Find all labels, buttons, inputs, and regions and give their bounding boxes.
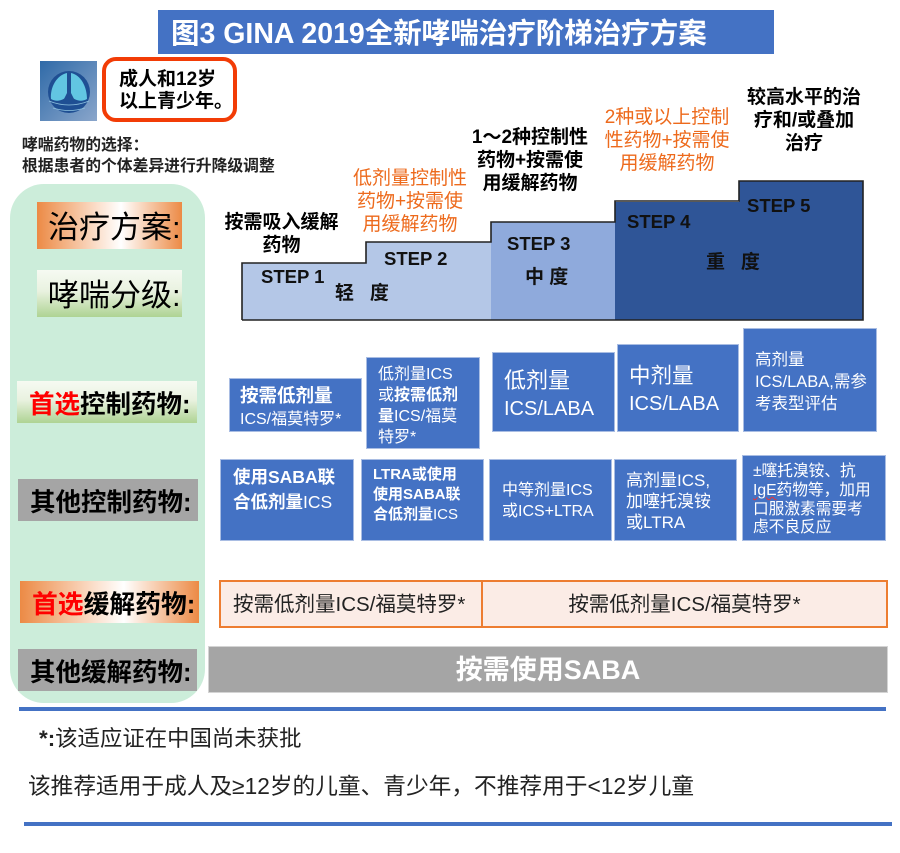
controller box: step 4 preferred: ICS/LABA [629, 393, 719, 415]
label: other reliever: 其他缓解药物: [30, 658, 192, 686]
step 1 heading: 按需吸入缓解 [224, 212, 338, 233]
step 5 heading [747, 86, 861, 154]
other controller box: step 5: IgE药物等，加用 [753, 482, 871, 499]
controller box: step 2 preferred: 量ICS/福莫 [378, 408, 457, 425]
label: asthma grade [37, 270, 182, 317]
panel: left row-label column [10, 184, 205, 703]
other controller box: step 4 [614, 459, 737, 541]
text block: medication selection note: 根据患者的个体差异进行升降级调整 [22, 158, 275, 174]
step 2 heading: 药物+按需使 [357, 191, 463, 212]
other controller box: step 2: 使用SABA联 [373, 486, 461, 503]
step 4 heading: 用缓解药物 [619, 153, 714, 174]
label: other controller: 其他控制药物: [30, 488, 192, 516]
controller box: step 5 preferred [743, 328, 877, 432]
footnote rule upper [19, 707, 886, 711]
label: treatment plan: 治疗方案: [48, 210, 181, 244]
callout: target population: 以上青少年。 [119, 91, 233, 112]
text block: medication selection note [22, 136, 275, 174]
controller box: step 4 preferred: 中剂量 [629, 364, 694, 388]
other controller box: step 3 [489, 459, 612, 541]
other controller box: step 3: 中等剂量ICS [502, 482, 593, 499]
reliever band: preferred [219, 580, 888, 628]
title banner [158, 10, 774, 54]
grade: mild: 轻 度 [335, 283, 389, 304]
controller box: step 2 preferred [366, 357, 480, 449]
grade: moderate: 中 度 [525, 267, 568, 288]
footnote: approval: *:该适应证在中国尚未获批 [39, 726, 301, 751]
step 1 label: STEP 1 [261, 266, 324, 287]
step 2 heading: 用缓解药物 [362, 214, 458, 235]
label: preferred reliever: 首选 [32, 590, 84, 618]
step 3 heading: 1～2种控制性 [472, 127, 588, 148]
step 3 heading [472, 126, 588, 194]
step 2 heading: 低剂量控制性 [353, 168, 467, 189]
step 4 heading [604, 107, 730, 174]
footnote: applicability: 该推荐适用于成人及≥12岁的儿童、青少年，不推荐用于<12岁儿童 [28, 773, 694, 799]
controller box: step 3 preferred: ICS/LABA [504, 398, 594, 420]
footnote rule lower [24, 822, 892, 826]
reliever: steps 1-2 [221, 582, 483, 626]
other controller box: step 5: ±噻托溴铵、抗 [753, 463, 856, 480]
reliever band: other: 按需使用SABA [456, 655, 640, 685]
label: preferred controller [17, 381, 197, 423]
other controller box: step 5: 虑不良反应 [753, 519, 831, 536]
controller box: step 5 preferred: 高剂量 [755, 351, 804, 369]
other controller box: step 1 [220, 459, 354, 541]
controller box: step 5 preferred: ICS/LABA,需参 [755, 373, 867, 391]
step 5 label: STEP 5 [747, 195, 810, 216]
step 2 label: STEP 2 [384, 248, 447, 269]
step 3 heading: 药物+按需使 [477, 150, 583, 171]
label: treatment plan [37, 202, 182, 249]
step 1 heading [224, 212, 338, 256]
other controller box: step 2 [361, 459, 484, 541]
other controller box: step 5: 口服激素需要考 [753, 501, 863, 518]
label: preferred reliever [20, 581, 199, 623]
step 2 heading [353, 168, 467, 235]
controller box: step 3 preferred: 低剂量 [504, 368, 570, 393]
controller box: step 1 preferred: 按需低剂量 [240, 385, 333, 406]
label: asthma grade: 哮喘分级: [48, 278, 181, 312]
reliever band: other [208, 646, 888, 693]
label: preferred reliever: 缓解药物: [84, 590, 195, 618]
reliever: steps 1-2: 按需低剂量ICS/福莫特罗* [233, 593, 465, 616]
other controller box: step 1: 合低剂量ICS [233, 492, 332, 512]
label: other controller [18, 479, 198, 521]
step 5 heading: 较高水平的治 [747, 87, 861, 108]
text block: medication selection note: 哮喘药物的选择： [22, 137, 148, 154]
step 5 heading: 治疗 [785, 133, 823, 154]
label: preferred controller: 控制药物: [80, 390, 191, 418]
title banner: 图3 GINA 2019全新哮喘治疗阶梯治疗方案 [171, 18, 707, 50]
other controller box: step 2: 合低剂量ICS [373, 506, 458, 523]
callout: target population: 成人和12岁 [119, 69, 216, 90]
controller box: step 1 preferred [229, 378, 362, 432]
step 4 heading: 性药物+按需使 [604, 130, 730, 151]
step 4 heading: 2种或以上控制 [605, 107, 729, 128]
icon: GINA logo [40, 61, 97, 121]
step 3 label: STEP 3 [507, 233, 570, 254]
callout: target population [102, 57, 237, 122]
other controller box: step 4: 或LTRA [626, 513, 685, 532]
chart: treatment staircase [241, 180, 864, 321]
other controller box: step 3: 或ICS+LTRA [502, 502, 594, 520]
step 3 heading: 用缓解药物 [482, 173, 578, 194]
step 1 heading: 药物 [262, 235, 300, 256]
reliever: steps 3-5: 按需低剂量ICS/福莫特罗* [568, 593, 801, 616]
controller box: step 2 preferred: 低剂量ICS [378, 366, 453, 383]
controller box: step 5 preferred: 考表型评估 [755, 395, 838, 413]
controller box: step 2 preferred: 特罗* [378, 429, 416, 446]
step 4 label: STEP 4 [627, 211, 690, 232]
controller box: step 1 preferred: ICS/福莫特罗* [240, 411, 341, 428]
other controller box: step 4: 高剂量ICS, [626, 471, 710, 490]
controller box: step 3 preferred [492, 352, 615, 432]
label: other reliever [18, 649, 197, 691]
label: preferred controller: 首选 [29, 390, 80, 418]
other controller box: step 4: 加噻托溴铵 [626, 492, 711, 511]
grade: severe: 重 度 [706, 252, 760, 273]
other controller box: step 2: LTRA或使用 [373, 466, 457, 483]
controller box: step 4 preferred [617, 344, 739, 432]
other controller box: step 1: 使用SABA联 [233, 467, 335, 487]
step 5 heading: 疗和/或叠加 [754, 110, 854, 131]
controller box: step 2 preferred: 或按需低剂 [378, 387, 458, 404]
other controller box: step 5 [742, 455, 886, 541]
